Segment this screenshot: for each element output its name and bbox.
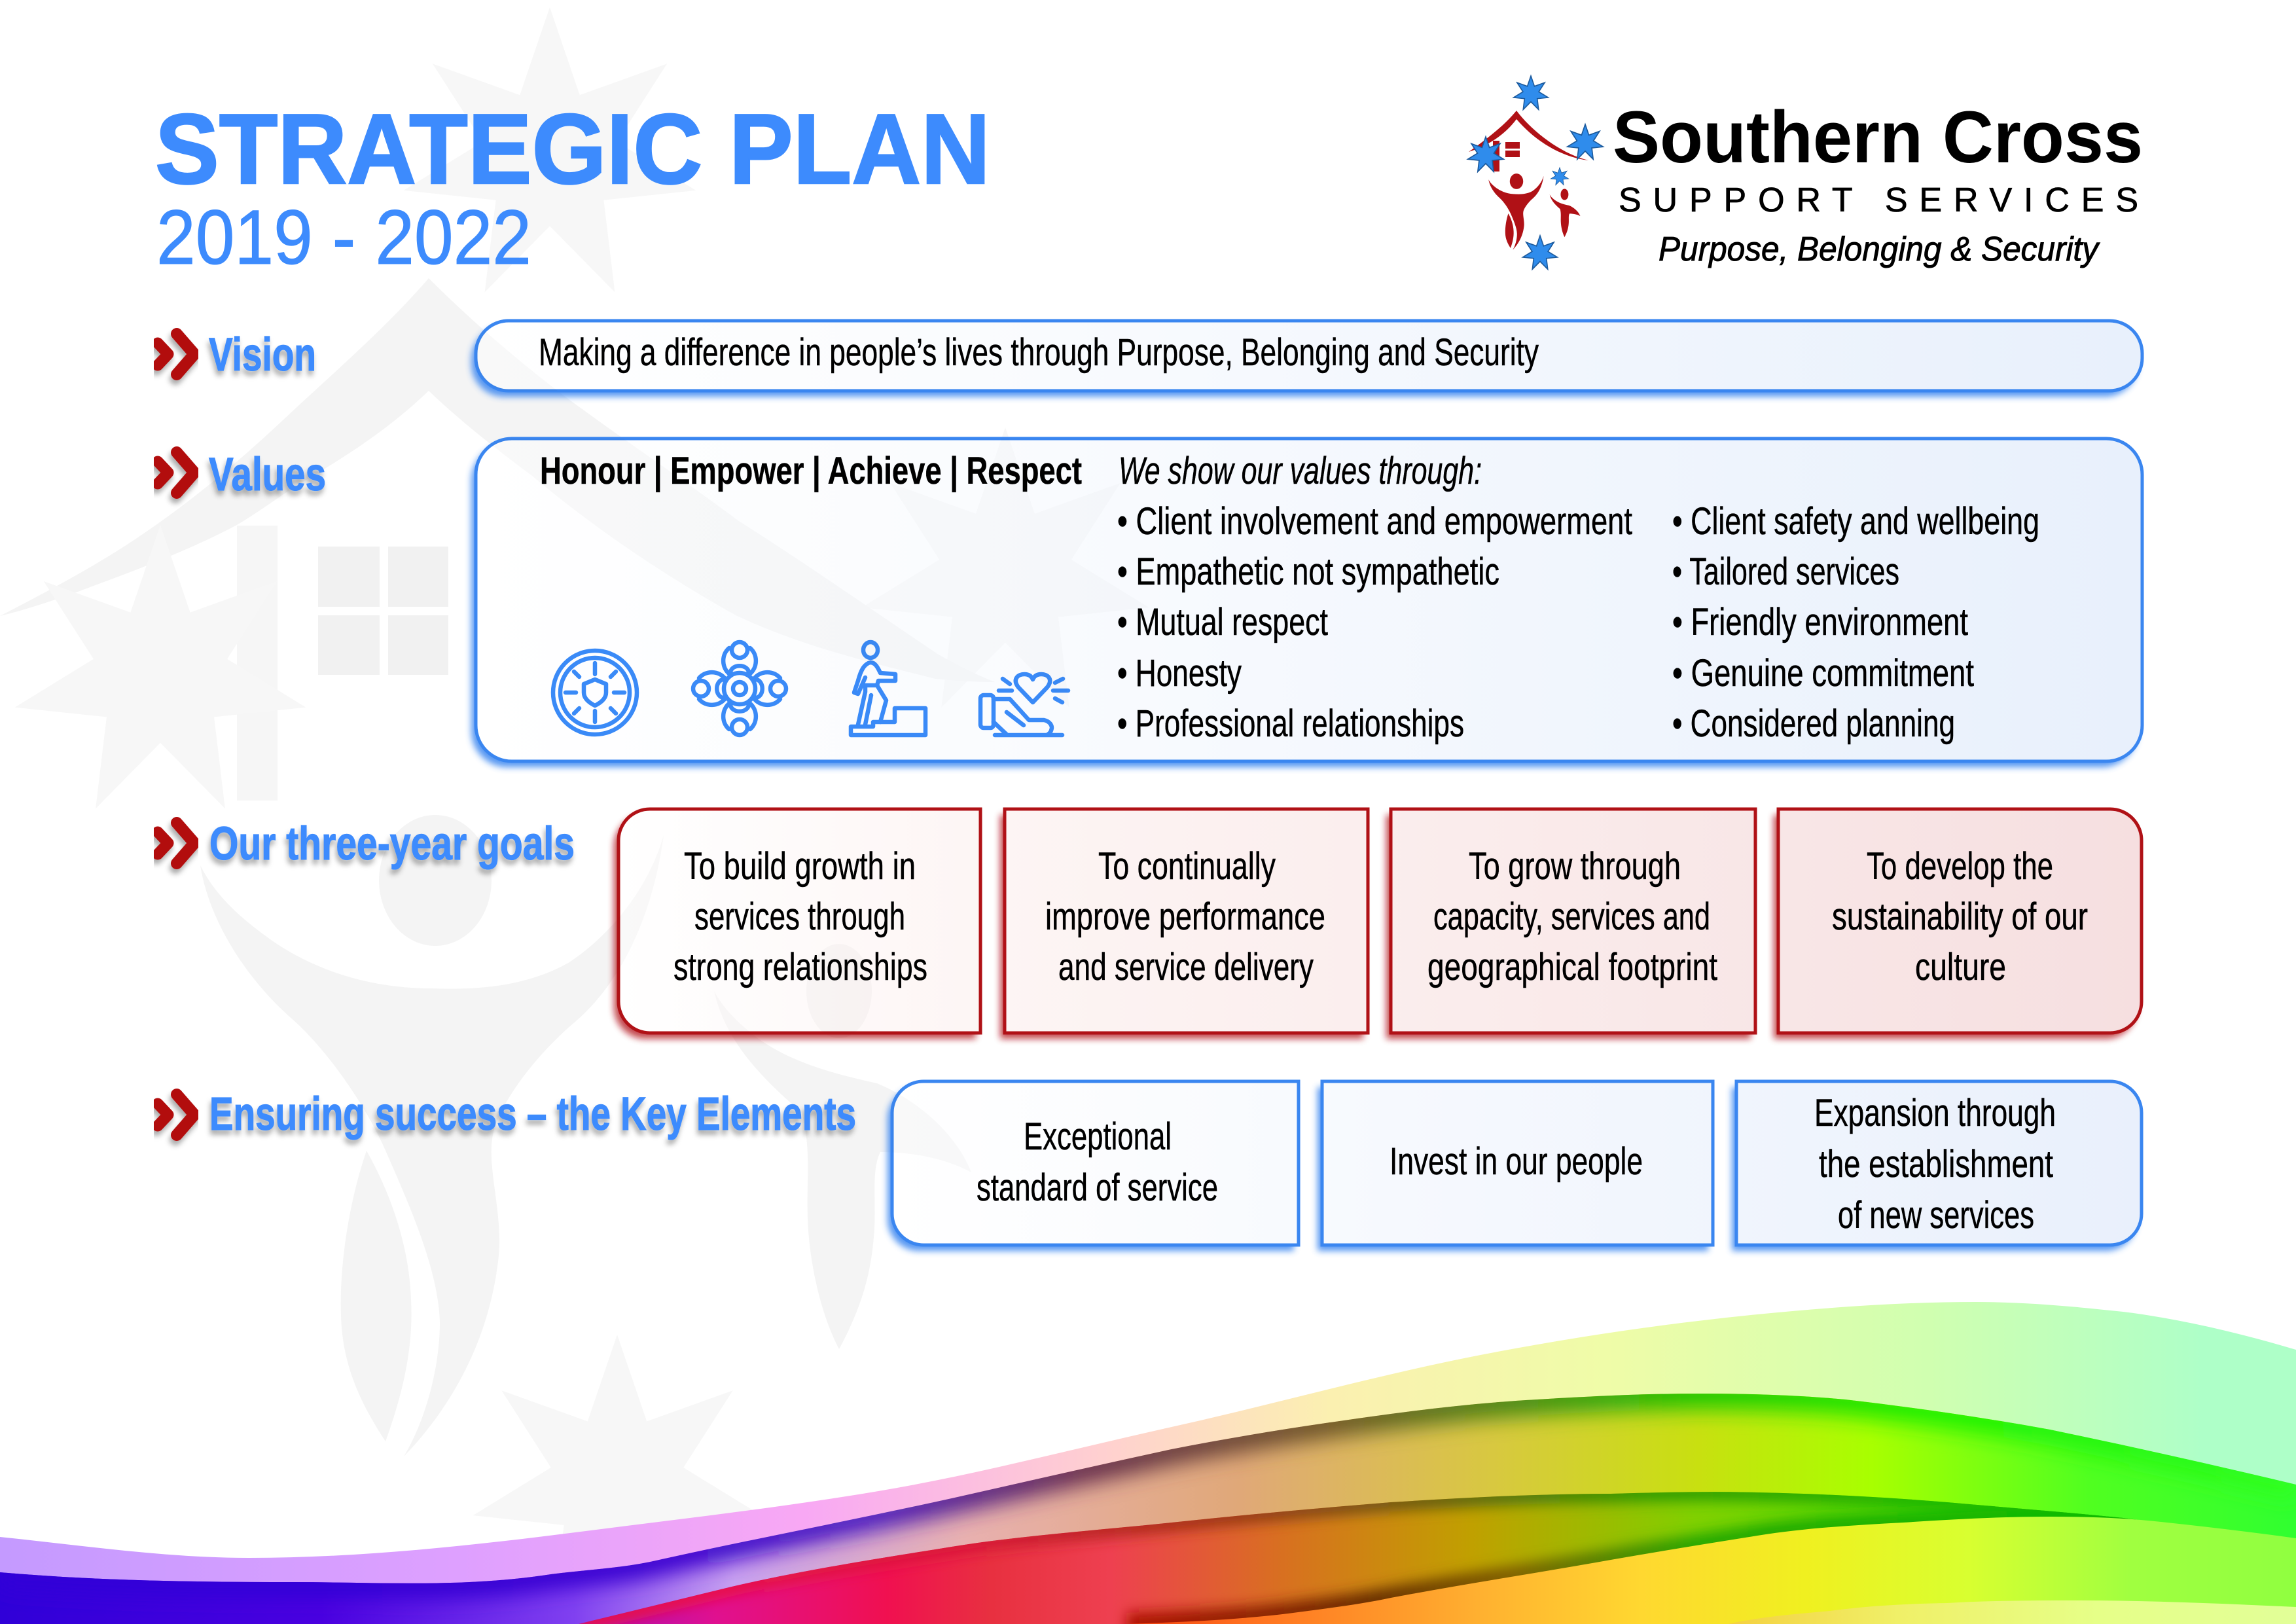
values list: left column: • Professional relationships — [1117, 702, 1464, 745]
panel: key element 1 — [888, 1081, 1299, 1251]
values list: right column: • Friendly environment — [1672, 601, 1968, 643]
goal 4 text: culture — [1915, 946, 2006, 988]
key element 3 text: Expansion through — [1814, 1092, 2056, 1134]
goal 1 text — [673, 845, 927, 988]
watermark: faint logo background — [0, 7, 1149, 1616]
goal 1 text: strong relationships — [673, 946, 927, 988]
logo icon: house, people and stars — [1468, 76, 1603, 269]
goal 3 text: To grow through — [1469, 845, 1681, 888]
panel: key element 3 — [1732, 1081, 2142, 1251]
logo wordmark: Southern Cross — [1613, 96, 2143, 178]
goal 3 text — [1427, 845, 1717, 988]
icon: person climbing stairs — [851, 642, 925, 735]
goal 3 text: geographical footprint — [1427, 946, 1717, 988]
goal 1 text: To build growth in — [684, 845, 916, 888]
goal 2 text: improve performance — [1045, 895, 1325, 938]
panel: goal 4 — [1774, 809, 2142, 1039]
goal 4 text: sustainability of our — [1832, 895, 2088, 938]
values list: right column: • Genuine commitment — [1672, 652, 1974, 695]
key element 3 text: of new services — [1838, 1194, 2034, 1236]
panel: goal 3 — [1386, 809, 1755, 1039]
heading: Vision: Vision — [209, 329, 316, 381]
vision text: Making a difference in people’s lives through Purpose, Belonging and Security — [539, 331, 1539, 374]
rainbow wave footer — [0, 1302, 2296, 1624]
heading: Values — [158, 449, 326, 501]
goal 4 text: To develop the — [1867, 845, 2053, 888]
key element 1 text: Exceptional — [1024, 1115, 1172, 1158]
icon: compass shield — [553, 651, 637, 734]
title: STRATEGIC PLAN — [155, 94, 990, 205]
key element 1 text — [977, 1115, 1218, 1209]
key element 3 text: the establishment — [1819, 1143, 2053, 1185]
icon: heart in hand — [980, 674, 1068, 735]
goal 2 text — [1045, 845, 1325, 988]
values list: left column: • Empathetic not sympathetic — [1117, 550, 1499, 593]
key element 1 text: standard of service — [977, 1166, 1218, 1209]
subtitle: years: 2019 - 2022 — [156, 194, 531, 281]
goal 2 text: and service delivery — [1058, 946, 1314, 988]
goal 3 text: capacity, services and — [1433, 895, 1710, 938]
heading: Ensuring success: Ensuring success – the Key Elements — [209, 1089, 856, 1140]
heading: Vision — [158, 329, 316, 381]
values list: right column: • Considered planning — [1672, 702, 1955, 745]
icon: people around gear — [693, 642, 786, 735]
logo: Southern Cross Support Services — [1468, 76, 2143, 269]
key element 3 text — [1814, 1092, 2056, 1236]
key element 2 text: Invest in our people — [1390, 1140, 1643, 1183]
logo tagline: Purpose, Belonging & Security — [1659, 230, 2100, 268]
goal 1 text: services through — [694, 895, 905, 938]
panel: goal 1 — [614, 809, 980, 1039]
values intro: We show our values through: — [1119, 450, 1482, 492]
values list: right column: • Client safety and wellbeing — [1672, 500, 2039, 543]
logo sub-line: SUPPORT SERVICES — [1619, 181, 2138, 219]
values list: left column — [1117, 500, 1632, 745]
values list: right column: • Tailored services — [1672, 550, 1899, 593]
panel: key element 2 — [1318, 1081, 1713, 1251]
heading: Values: Values — [209, 449, 326, 501]
panel: vision — [471, 321, 2142, 397]
values list: left column: • Mutual respect — [1117, 601, 1328, 643]
values names: Honour | Empower | Achieve | Respect — [540, 450, 1082, 492]
values list: left column: • Honesty — [1117, 652, 1242, 695]
goal 2 text: To continually — [1098, 845, 1276, 888]
panel: goal 2 — [1000, 809, 1368, 1039]
goal 4 text — [1832, 845, 2088, 988]
values list: right column — [1672, 500, 2039, 745]
values list: left column: • Client involvement and empowerment — [1117, 500, 1632, 543]
panel: values — [471, 439, 2142, 767]
heading: Our three-year goals: Our three-year goals — [209, 818, 575, 870]
